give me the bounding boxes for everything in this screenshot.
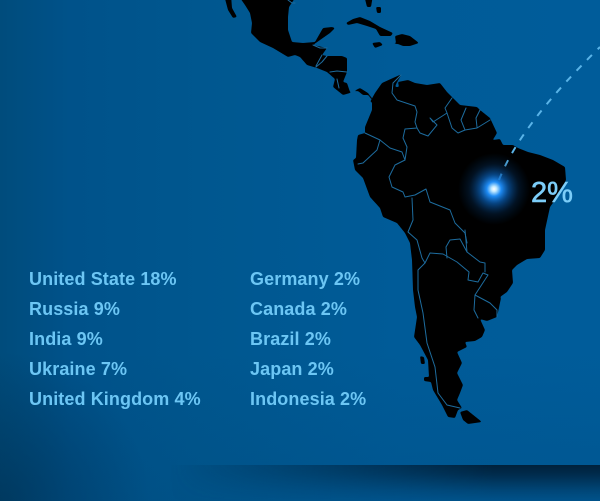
country list: right column: Canada 2% <box>250 299 347 319</box>
country list: right column <box>250 269 366 409</box>
floor shadow <box>202 465 600 500</box>
country list: right column: Japan 2% <box>250 359 334 379</box>
country list: left column <box>29 269 201 409</box>
landmass: Mexico and Central America <box>224 0 419 104</box>
country list: left column: India 9% <box>29 329 103 349</box>
landmass: South America <box>353 74 566 424</box>
dashed connector arc <box>499 47 600 180</box>
country list: left column: Russia 9% <box>29 299 120 319</box>
country list: left column: United Kingdom 4% <box>29 389 201 409</box>
country list: left column: Ukraine 7% <box>29 359 127 379</box>
country borders <box>288 0 497 408</box>
callout: Brazil 2%: 2% <box>531 177 573 209</box>
country list: right column: Brazil 2% <box>250 329 331 349</box>
country list: right column: Indonesia 2% <box>250 389 366 409</box>
country list: right column: Germany 2% <box>250 269 360 289</box>
country list: left column: United State 18% <box>29 269 177 289</box>
location glow marker: Brazil <box>458 153 530 225</box>
